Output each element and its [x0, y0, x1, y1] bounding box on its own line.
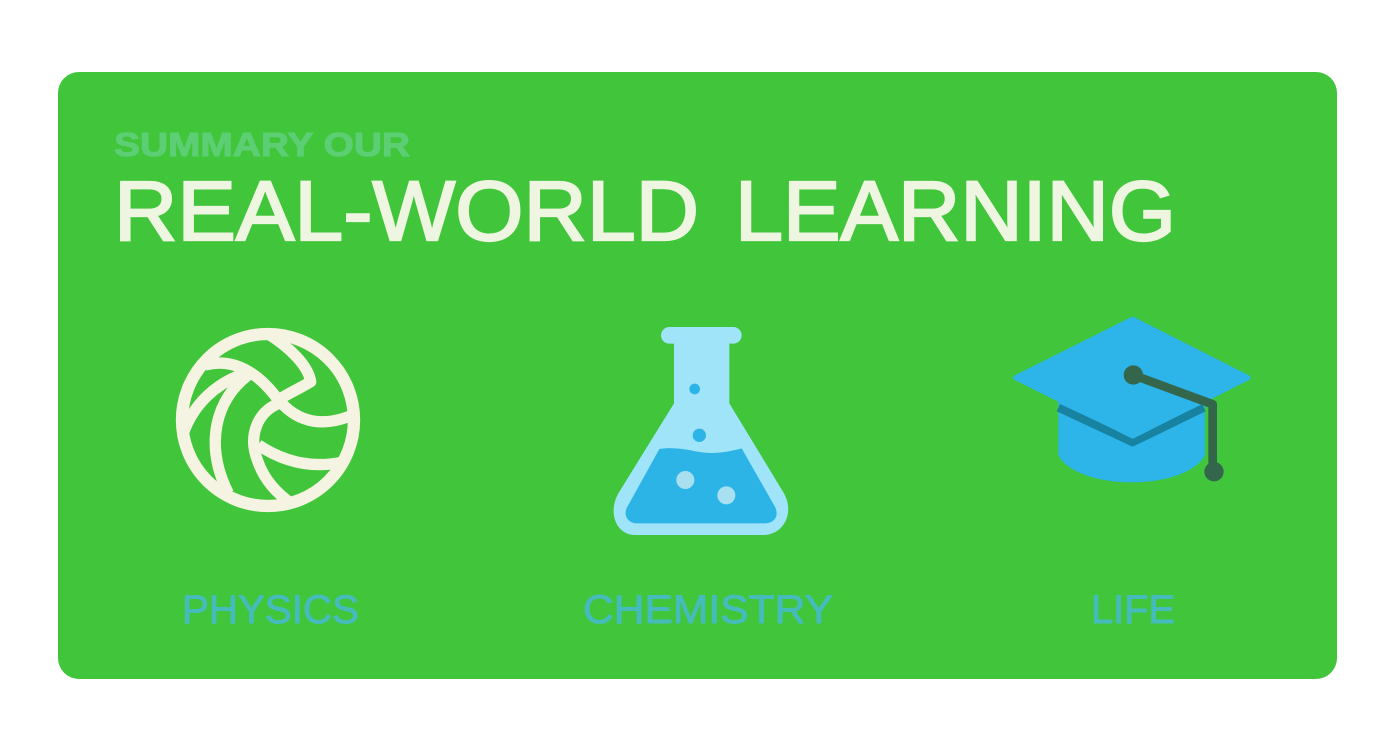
- title: LEARNING: [735, 164, 1176, 258]
- icon: graduation cap: [1015, 319, 1248, 482]
- label: life: LIFE: [1091, 588, 1175, 632]
- label: physics: PHYSICS: [182, 588, 359, 632]
- icon: ball: [182, 334, 355, 506]
- label: chemistry: CHEMISTRY: [583, 588, 833, 632]
- icon: flask: [614, 327, 788, 535]
- title: [114, 164, 1176, 258]
- eyebrow text: SUMMARY OUR: [114, 126, 410, 163]
- title: REAL-WORLD: [114, 164, 699, 258]
- panel: green card: [58, 72, 1337, 679]
